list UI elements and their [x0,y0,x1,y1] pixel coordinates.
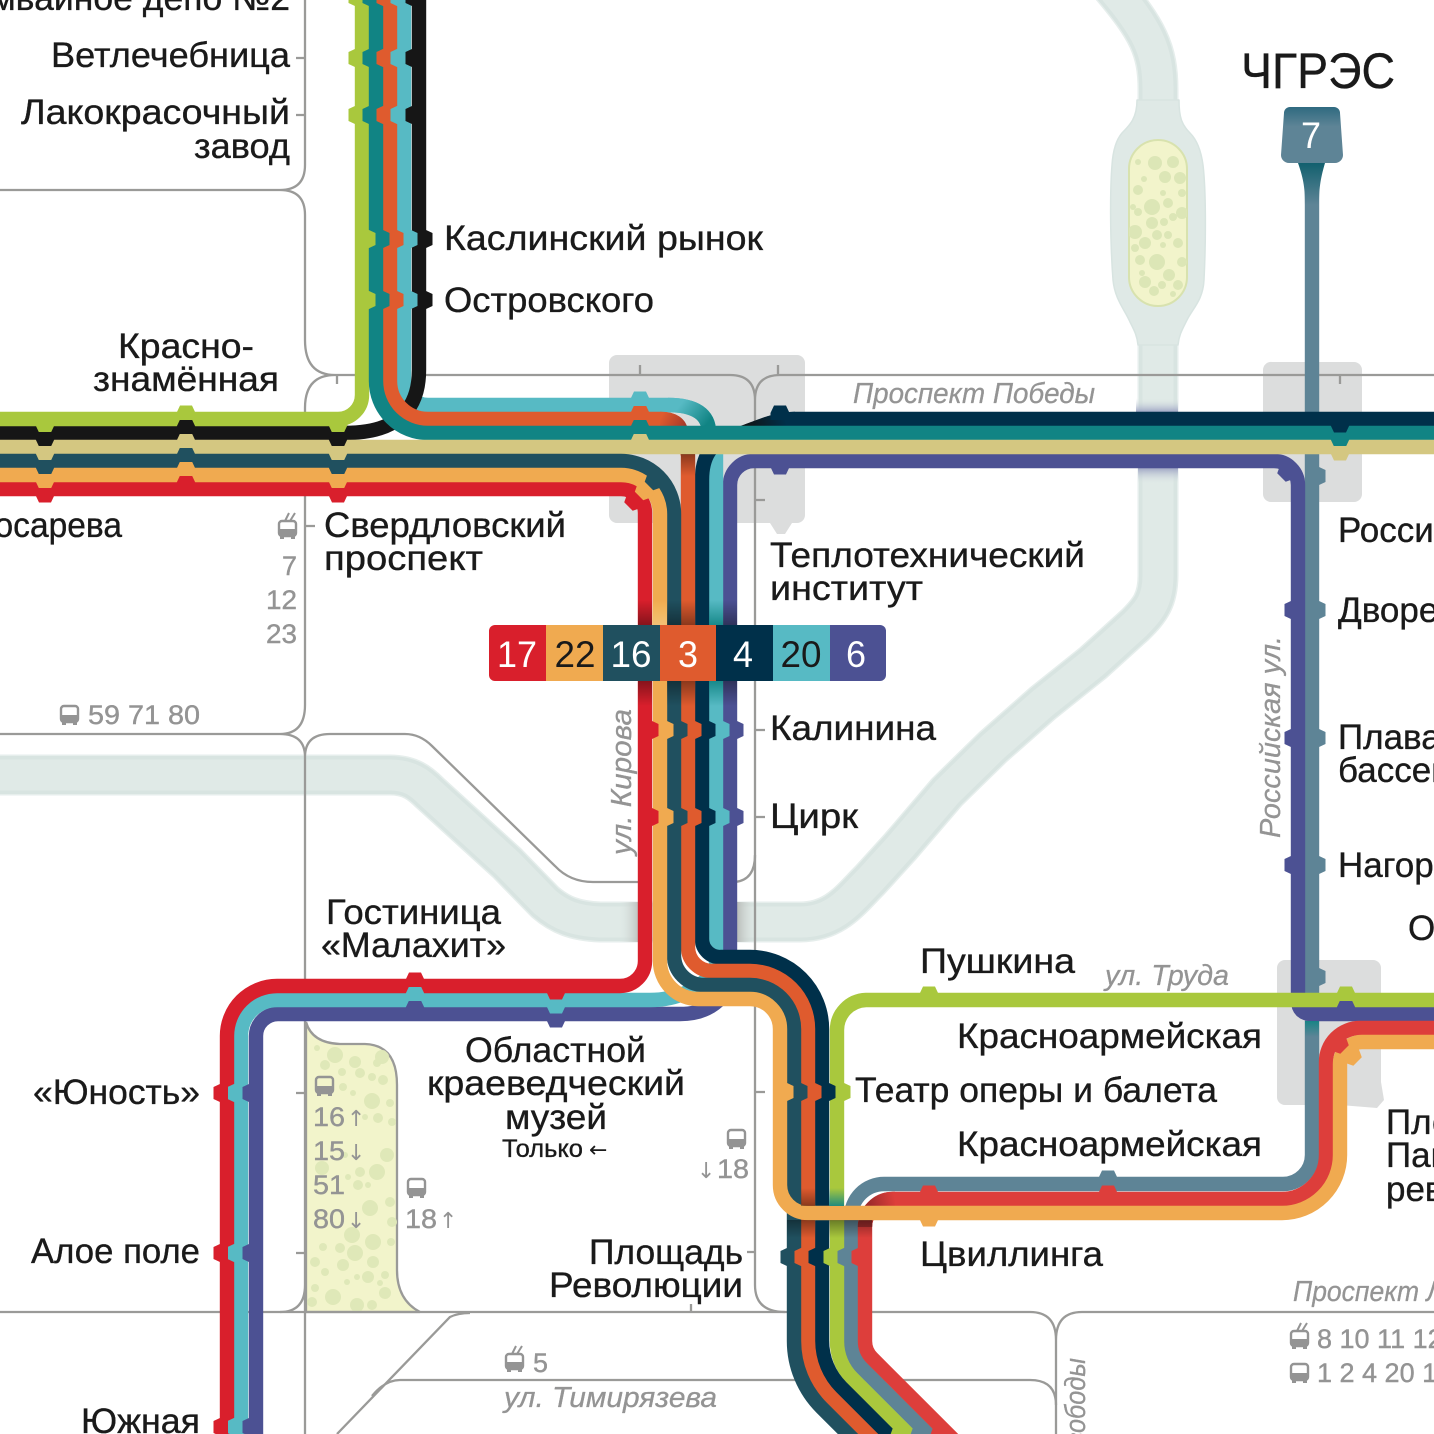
line 4 curve shading [730,419,795,437]
street names: ул. Кирова [606,709,638,857]
bus park list: 80 [313,1204,345,1234]
station names: Областной [465,1031,646,1070]
bus park list: ↓ [347,1141,365,1166]
station names: знамённая [93,360,279,399]
station names: Калинина [770,709,937,748]
route badge strip [489,625,886,681]
khaki line [0,440,1434,454]
terminus sign: route 7 [1281,107,1343,205]
black line [0,0,419,433]
bus park list: 15 [313,1136,345,1166]
station names: ЧГРЭС [1241,43,1395,99]
transfer info: bus and trolleybus routes [61,513,1434,1388]
station platform: Krasnoarmeyskaya [1277,960,1384,1108]
station names: Цирк [770,797,859,836]
teal line [376,0,1434,433]
station names: Площадь [589,1233,743,1272]
route badge strip: 4 [733,634,753,675]
station names: Только [502,1135,583,1163]
Kalinina and Tsirk stations [644,720,744,826]
bus 59 71 80: 59 71 80 [88,700,200,730]
Theatre and Ploshchad Revolyutsii stations [779,1082,866,1266]
line 16 slate [0,461,865,1434]
route badge strip: 3 [678,634,698,675]
trolleybus Sverdlovsky: 23 [266,619,297,649]
trolleybus Sverdlovsky [266,513,297,649]
line 3 orange-red [390,0,885,1434]
street names: ул. Тимирязева [502,1382,717,1414]
street names: Российская ул. [1255,636,1287,838]
station names: Красноармейская [957,1125,1262,1164]
station names: Алое поле [31,1232,200,1271]
station platform: Rossiyskaya [1263,362,1362,502]
bus 18 down: ↓ [697,1159,715,1184]
station names: проспект [324,539,483,578]
station names: краеведческий [427,1064,685,1103]
station names: Теплотехнический [770,536,1085,575]
route badge strip: 6 [846,634,866,675]
bus 18 up: ↑ [439,1209,457,1234]
station names: Свердловский [324,506,566,545]
route badge strip: 20 [780,634,822,675]
line 7 steel [851,163,1312,1434]
terminus sign: route 7: 7 [1301,115,1321,156]
line 22 orange [0,475,1434,1213]
river Miass [0,0,1205,942]
station names: музей [505,1098,607,1137]
Yunost, Aloe Pole, Yuzhnaya stations [214,1084,257,1434]
Krasnoznamennaya and Kosareva group [36,406,348,502]
line 3 curve shading [660,419,681,433]
station names: Пушкина [920,942,1076,981]
Rossiyskaya line stations [1275,418,1350,874]
line 20 curve shading [668,405,709,433]
line 20 cyan [241,0,716,1434]
pond park on river [1128,140,1188,306]
station names: Красноармейская [957,1017,1262,1056]
trolleybus Sverdlovsky: 7 [282,551,297,581]
station names: Гостиница [326,893,502,932]
red line curve shading [865,1199,895,1227]
station names: институт [770,569,923,608]
bus 18 down: 18 [717,1154,749,1184]
line 17 red [0,489,645,1434]
bus park list [313,1077,365,1234]
bus park list: ↑ [347,1107,365,1132]
Sverdlovsky prospekt stations [622,392,790,513]
station names: Каслинский рынок [444,219,764,258]
top vertical stations [348,0,432,310]
bus park list: ↓ [347,1209,365,1234]
line 6 indigo [256,461,1434,1434]
crossing shading near route badges and intersections [638,454,1319,1238]
park on Lenin side [306,1022,420,1312]
diagonal bottom stations [888,1423,951,1434]
street names [502,378,1434,1434]
green line right [837,1000,1434,1434]
station names: Революции [549,1266,743,1305]
station names: Цвиллинга [920,1235,1104,1274]
trolleybus Sverdlovsky: 12 [266,585,297,615]
Pushkina, Tsvillinga, Krasnoarmeyskaya stations [920,968,1364,1226]
trolleybus 5: 5 [533,1348,548,1378]
red line right branch [865,1028,1434,1434]
bus 18 down [697,1130,749,1184]
route badge strip: 16 [610,634,652,675]
station names: Ветлечебница [51,36,291,75]
station names: Островского [444,281,654,320]
station names: «Юность» [33,1073,200,1112]
station names: ← [589,1138,607,1163]
bus 18 up: 18 [405,1204,437,1234]
trolleybus 5 [506,1346,548,1378]
station names: Красно- [118,327,254,366]
bus park list: 16 [313,1102,345,1132]
station names: Театр оперы и балета [855,1071,1218,1110]
green line left [0,0,362,419]
bus 18 up [405,1179,457,1234]
route badge strip: 22 [554,634,596,675]
station names: «Малахит» [321,926,506,965]
station names: Лакокрасочный [21,93,290,132]
station platform: Sverdlovsky / Teplotekhnichesky [609,355,805,534]
route badge strip: 17 [497,634,537,675]
Malakhit and museum stations [406,972,566,1028]
street names: ул. Труда [1103,960,1229,992]
station names: завод [194,127,290,166]
street names: Проспект Победы [853,378,1095,410]
bus park list: 51 [313,1170,345,1200]
line 4 navy [702,419,1434,1434]
